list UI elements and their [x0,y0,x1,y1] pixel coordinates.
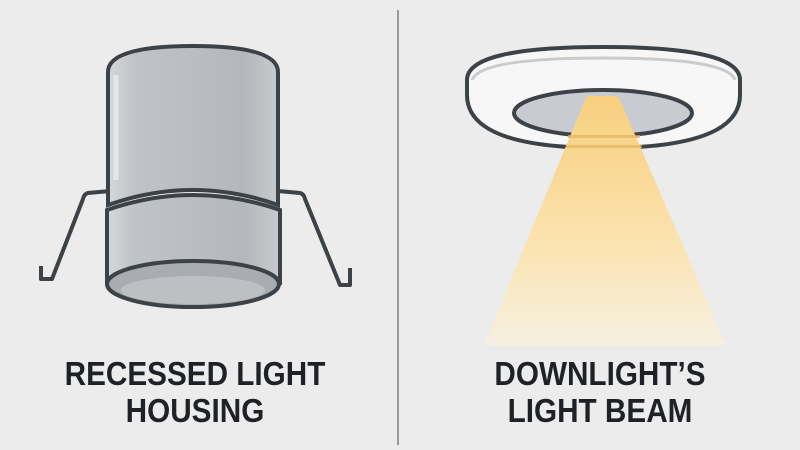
brackets [41,191,350,285]
label: downlight's light beam: LIGHT BEAM [508,392,692,429]
label: recessed light housing [65,355,326,429]
label: downlight's light beam [494,355,706,429]
upper cylinder [108,46,278,205]
label: recessed light housing: RECESSED LIGHT [65,355,325,392]
lower band [107,195,280,283]
label: recessed light housing: HOUSING [126,392,264,429]
icon: downlight with beam [467,47,740,345]
label: downlight's light beam: DOWNLIGHT’S [494,355,706,392]
divider [397,10,399,445]
light beam [484,96,726,345]
icon: recessed housing [41,46,350,307]
